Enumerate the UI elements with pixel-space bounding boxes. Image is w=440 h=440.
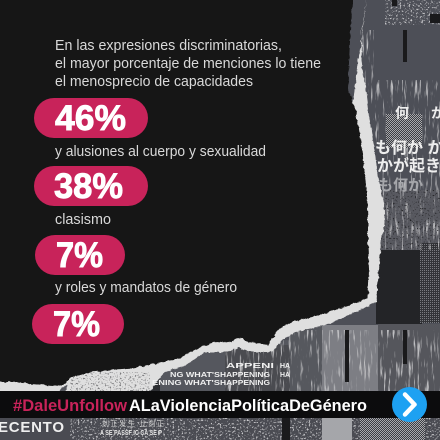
collage: left light streak strip [360,30,374,120]
collage: Japanese text: かが起き [377,156,440,175]
collage: bottom strip detail [282,418,425,440]
stat pill: 46% [34,98,148,138]
stat pill: 46%: 46% [55,99,126,138]
collage: halftone patch centre [386,114,422,148]
collage: HAPPENING text: NG WHAT'S [170,370,220,379]
collage: dark speckle texture [376,190,440,250]
caption: roles y mandatos: y roles y mandatos de género [55,280,237,296]
torn paper edge [0,0,385,393]
collage: mid light streak texture [374,80,440,250]
collage: bottom speckle texture [70,418,440,440]
caption: cuerpo y sexualidad: y alusiones al cuerpo y sexualidad [55,144,266,160]
hashtag bar [0,391,440,418]
collage: Japanese text: 何 [395,105,409,121]
collage: HAPPENING text: HAPPENING [220,378,270,387]
intro text: el mayor porcentaje de menciones lo tiene [55,56,321,72]
collage: lower streak texture [225,330,440,391]
panel: dark torn paper [0,0,369,386]
hashtag text: #DaleUnfollow [13,396,128,415]
icon: next arrow button [392,387,427,422]
collage: Japanese text [375,105,440,175]
intro text: En las expresiones discriminatorias, [55,38,282,54]
collage: lower grey columns [130,324,440,391]
collage: faded Japanese text: も何か [378,176,423,194]
stat pill: 38%: 38% [54,167,123,206]
intro text: el menosprecio de capacidades [55,74,253,90]
collage: HAPPENING text: HAPPENING [220,370,270,379]
stat pill: 7% roles [35,235,125,275]
collage: speckled lower right block [372,190,440,250]
stat pill: 7% last: 7% [53,305,100,344]
collage: bottom French text: A SE PASSF IC ÇA SE P [100,430,162,437]
collage: bottom CJK text: 刻正发生 比刻正 [102,419,164,428]
collage: top speckle texture [385,0,440,25]
hashtag campaign text: ALaViolenciaPolíticaDeGénero [129,396,367,415]
stat pill: 7% last [32,304,124,344]
stat pill: 38% [34,166,148,206]
collage: dark patch right [376,250,422,324]
collage: HAPPENING text: HA [280,361,291,370]
collage: HAPPENING text: APPENI [226,361,274,370]
collage: HAPPENING text: HA [280,370,291,379]
collage: torn lower-left grey wash [70,372,150,391]
collage: HAPPENING text [152,361,291,387]
intro text [55,38,321,90]
collage: HAPPENING text: ENING WHAT'S [152,378,220,387]
collage: dark specks upper right [345,0,440,382]
stat pill: 7% roles: 7% [56,236,103,275]
caption: clasismo: clasismo [55,212,111,228]
collage: halftone patch right [420,243,440,323]
